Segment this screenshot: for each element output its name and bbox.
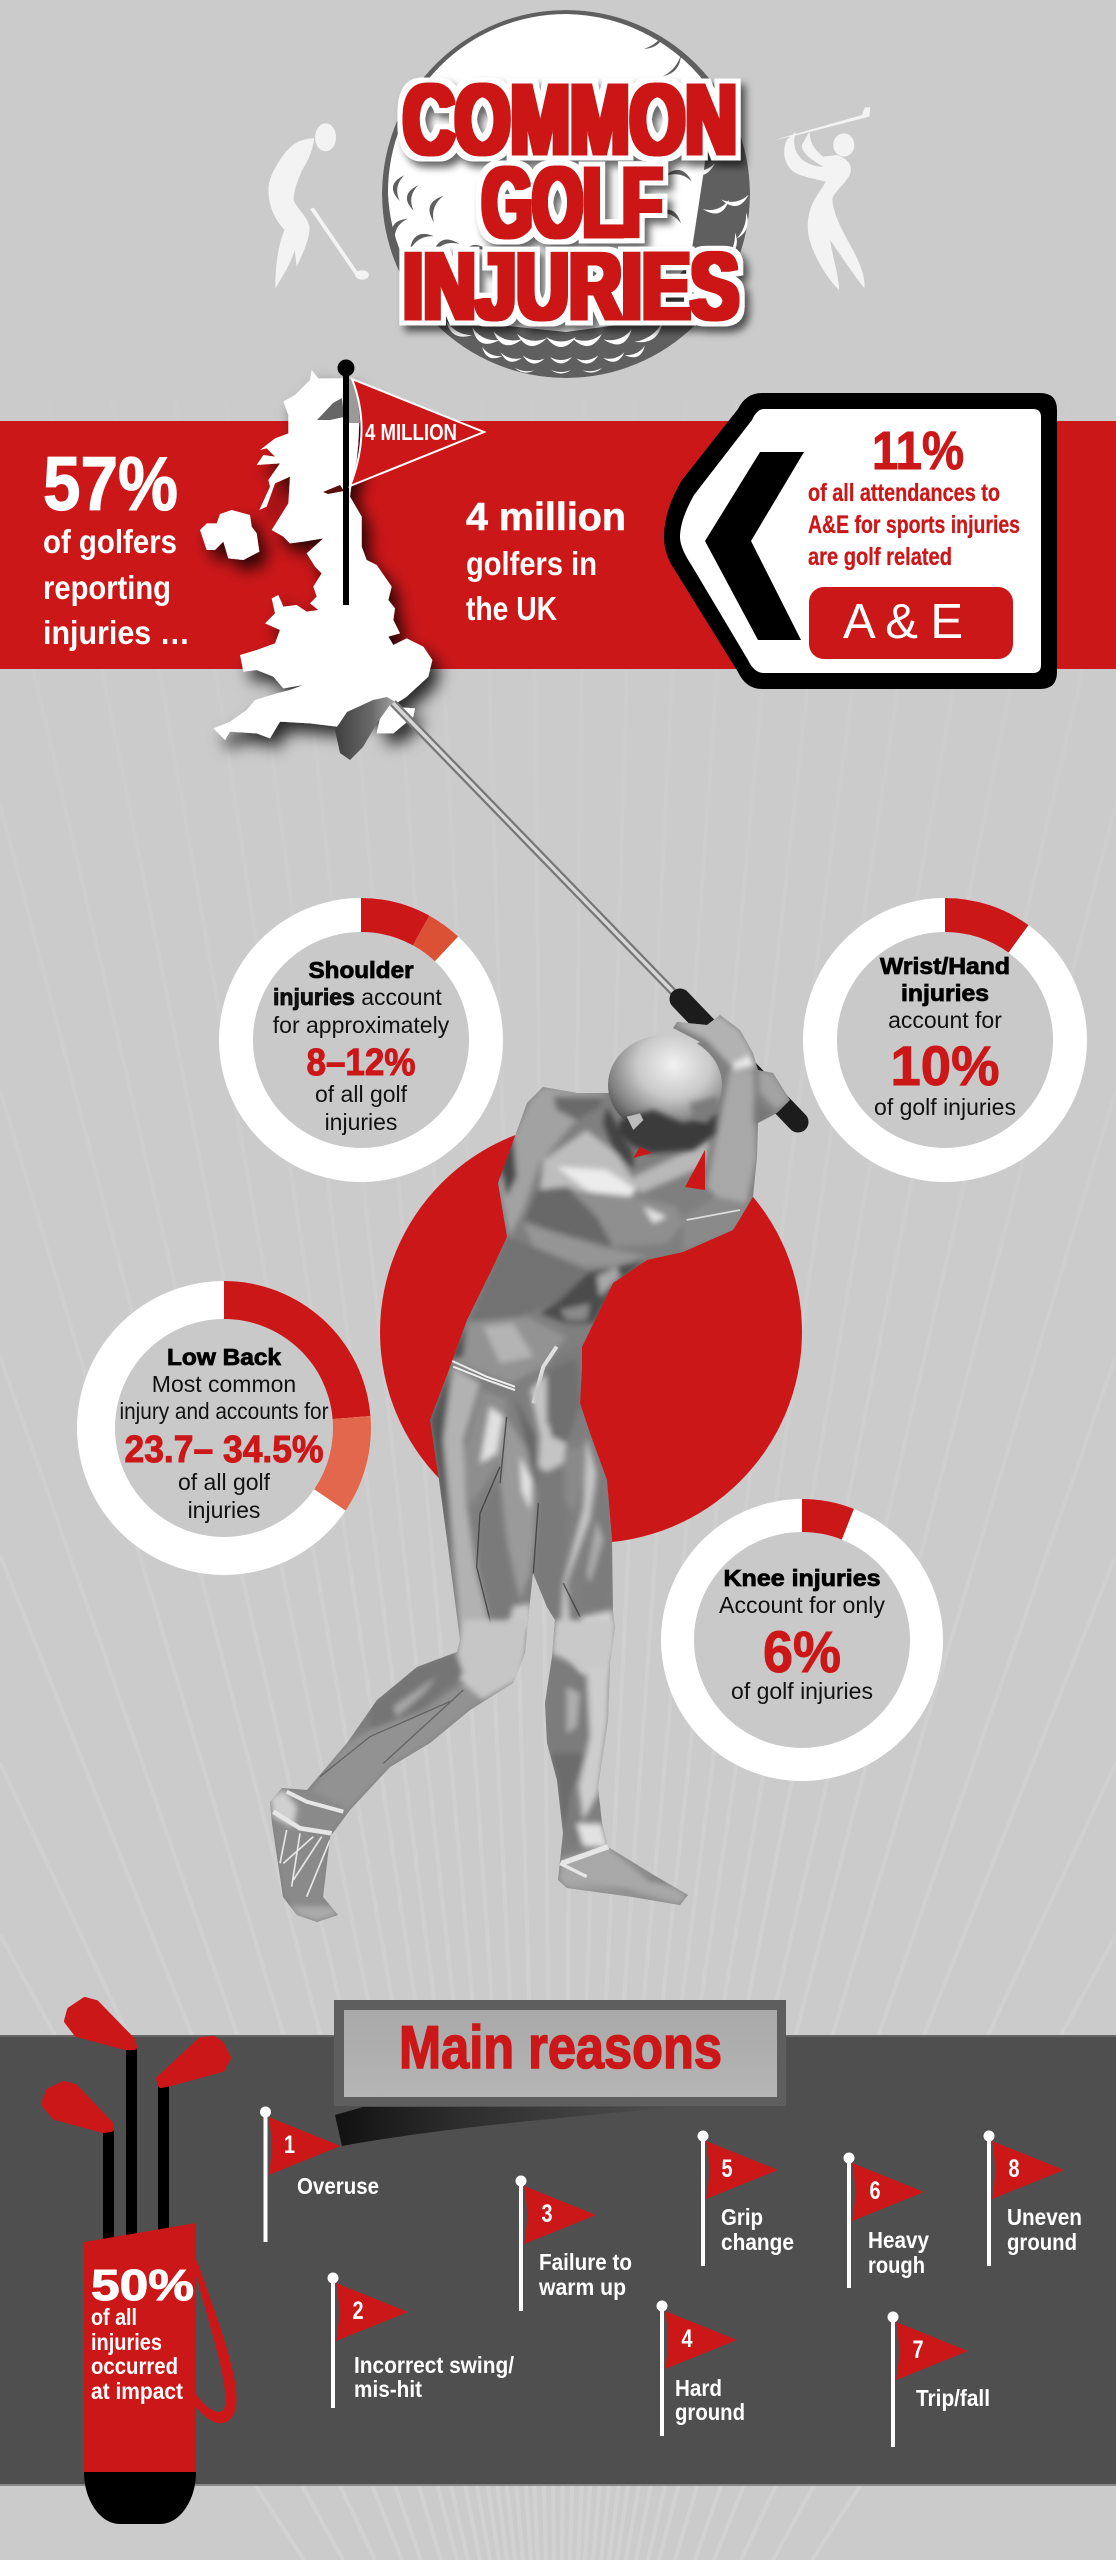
- flag 8: uneven ground: ground: [1007, 2229, 1077, 2255]
- donut: wrist and hand injuries: Wrist/Hand: [880, 953, 1010, 979]
- sign text: of all attendances to: [808, 479, 1000, 507]
- flag 4: hard ground: Hard: [675, 2375, 722, 2401]
- club head: left: [44, 2084, 111, 2130]
- flag 1: overuse: 1: [284, 2131, 295, 2159]
- stat: 50% at impact: of all: [91, 2304, 137, 2330]
- stat: 57% of golfers reporting injuries: of golfers: [43, 523, 177, 560]
- shadow from heading box: [335, 2107, 676, 2146]
- flag 3: failure to warm up: 3: [542, 2200, 552, 2228]
- title: COMMON: [403, 64, 737, 176]
- flag 4: hard ground: ground: [675, 2399, 745, 2425]
- donut: knee injuries: of golf injuries: [731, 1678, 873, 1704]
- donut: wrist and hand injuries: [803, 898, 1087, 1182]
- flag 5: grip change: change: [721, 2229, 794, 2255]
- flag 2: incorrect swing: [328, 2272, 515, 2408]
- stat: 57% of golfers reporting injuries: 57%: [43, 442, 178, 527]
- flag 3: failure to warm up: [516, 2176, 632, 2311]
- stat: 4 million golfers in the UK: golfers in: [466, 545, 597, 582]
- donut: low back: injury and accounts for: [120, 1398, 329, 1424]
- icon: flag with 4 million: [338, 360, 484, 605]
- donut: low back: [77, 1281, 371, 1575]
- flag 8: uneven ground: 8: [1008, 2155, 1020, 2183]
- flag 2: incorrect swing: Incorrect swing/: [354, 2352, 515, 2378]
- donut: wrist and hand injuries: 10%: [890, 1034, 1000, 1097]
- flag 6: heavy rough: Heavy: [868, 2227, 929, 2253]
- donut: shoulder injuries: [219, 898, 503, 1182]
- icon: flag with 4 million: 4 MILLION: [365, 419, 457, 445]
- flag 3: failure to warm up: Failure to: [539, 2249, 632, 2275]
- icon: black chevron: [705, 452, 804, 640]
- flag 7: trip or fall: Trip/fall: [916, 2385, 990, 2411]
- panel: main reasons: [0, 2000, 1116, 2486]
- donut: knee injuries: 6%: [763, 1620, 841, 1685]
- stat: 50% at impact: injuries: [91, 2329, 162, 2355]
- icon: golfer addressing ball: [268, 123, 369, 288]
- icon: golf ball: [382, 10, 752, 378]
- flag 6: heavy rough: rough: [868, 2252, 925, 2278]
- stat: 57% of golfers reporting injuries: injuries …: [43, 614, 190, 651]
- donut: wrist and hand injuries: account for: [888, 1007, 1002, 1033]
- club head: right: [159, 2039, 228, 2085]
- flag 2: incorrect swing: 2: [352, 2297, 364, 2325]
- flag 5: grip change: [698, 2130, 794, 2266]
- icon: golfer in backswing: [774, 107, 870, 290]
- stat: 4 million golfers in the UK: [466, 496, 626, 627]
- red circle behind figure: [380, 1121, 802, 1543]
- golfer face: [617, 1097, 720, 1153]
- donut: shoulder injuries: injuries account: [273, 984, 442, 1010]
- golf bag: [44, 2000, 235, 2524]
- flag 1: overuse: Overuse: [297, 2173, 379, 2199]
- donut: wrist and hand injuries: injuries: [901, 980, 989, 1006]
- flag 4: hard ground: [656, 2300, 745, 2436]
- flag 6: heavy rough: [844, 2152, 929, 2288]
- stat: 4 million golfers in the UK: the UK: [466, 590, 557, 627]
- flag 1: overuse: [260, 2106, 379, 2242]
- donut: shoulder injuries: 8–12%: [306, 1042, 416, 1084]
- button: A & E: [809, 587, 1013, 659]
- flag 4: hard ground: 4: [682, 2325, 693, 2353]
- flag 8: uneven ground: Uneven: [1007, 2204, 1082, 2230]
- donut: low back: of all golf: [178, 1469, 271, 1495]
- stat: 50% at impact: at impact: [91, 2378, 183, 2404]
- map details: firths: [317, 398, 344, 494]
- flag 5: grip change: Grip: [721, 2204, 763, 2230]
- heading: Main reasons: [334, 2000, 786, 2106]
- flag 7: trip or fall: 7: [912, 2336, 924, 2364]
- flag 5: grip change: 5: [722, 2155, 733, 2183]
- club head: centre: [67, 2000, 134, 2047]
- stat: 50% at impact: occurred: [91, 2353, 178, 2379]
- gaps between arms showing red circle: [633, 1147, 705, 1190]
- flag 3: failure to warm up: warm up: [538, 2274, 626, 2300]
- donut: shoulder injuries: injuries: [325, 1109, 397, 1135]
- donut: knee injuries: Account for only: [719, 1592, 886, 1618]
- stat: 57% of golfers reporting injuries: [43, 442, 190, 651]
- button: A & E: A & E: [843, 595, 963, 649]
- golf club shaft and grip: [393, 703, 798, 1122]
- golfer head: [608, 1035, 722, 1135]
- donut: shoulder injuries: for approximately: [273, 1012, 450, 1038]
- stat: 50% at impact: 50%: [91, 2261, 194, 2310]
- heading: Main reasons: Main reasons: [399, 2014, 722, 2081]
- donut: low back: Low Back: [167, 1344, 281, 1370]
- title: INJURIES: [403, 233, 739, 340]
- donut: shoulder injuries: of all golf: [315, 1081, 408, 1107]
- stat: 50% at impact: [91, 2261, 194, 2404]
- flag 6: heavy rough: 6: [870, 2177, 880, 2205]
- bag base: [84, 2472, 196, 2524]
- donut: shoulder injuries: Shoulder: [308, 957, 414, 983]
- flag 2: incorrect swing: mis-hit: [354, 2376, 422, 2402]
- donut: low back: injuries: [188, 1497, 260, 1523]
- flag 7: trip or fall: [888, 2312, 990, 2447]
- donut: wrist and hand injuries: of golf injuries: [874, 1094, 1016, 1120]
- title: GOLF: [482, 147, 662, 259]
- sign text: A&E for sports injuries: [808, 511, 1020, 539]
- bag body: [84, 2223, 196, 2472]
- donut: low back: 23.7– 34.5%: [124, 1429, 324, 1471]
- red banner: [0, 421, 1116, 669]
- stat: 4 million golfers in the UK: 4 million: [466, 496, 626, 539]
- stat: 11%: 11%: [872, 421, 964, 481]
- panel: A&E sign: [664, 393, 1057, 689]
- club head: [335, 697, 397, 760]
- flag 8: uneven ground: [984, 2130, 1082, 2266]
- stat: 57% of golfers reporting injuries: reporting: [43, 569, 171, 606]
- donut: knee injuries: [661, 1499, 943, 1781]
- title: [403, 64, 739, 340]
- sign text: [808, 479, 1020, 571]
- sign text: are golf related: [808, 543, 952, 571]
- figure: muscular golfer: [260, 1010, 800, 1930]
- bag strap: [194, 2262, 235, 2422]
- map: United Kingdom: [200, 370, 432, 740]
- donut: knee injuries: Knee injuries: [724, 1565, 880, 1591]
- donut: low back: Most common: [152, 1371, 296, 1397]
